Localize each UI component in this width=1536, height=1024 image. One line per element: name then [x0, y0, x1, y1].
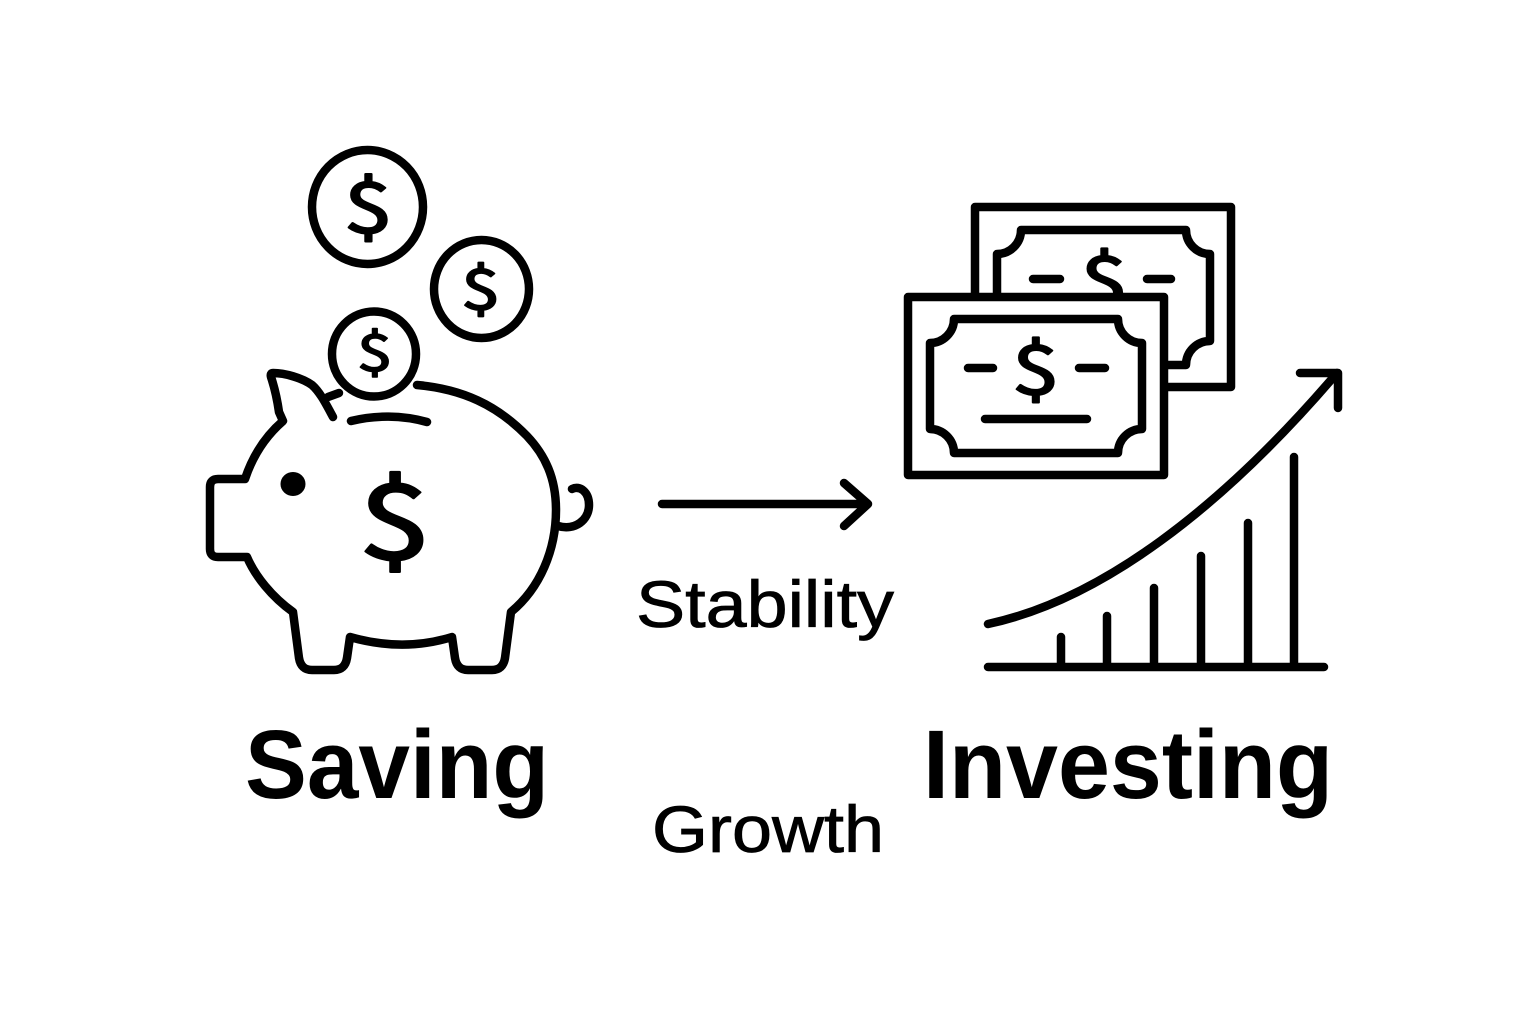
icon: rear banknote [975, 207, 1231, 387]
icon: piggy bank: $ [358, 438, 431, 589]
chart: rising bars with trend arrow [988, 373, 1338, 667]
heading: saving: Saving [245, 710, 549, 819]
icon: right coin [434, 240, 529, 338]
icon: right coin: $ [461, 245, 500, 326]
icon: front banknote: $ [1012, 316, 1059, 414]
icon: piggy bank [210, 373, 589, 670]
icon: large coin [312, 150, 423, 264]
icon: front banknote [908, 297, 1164, 475]
icon: lower coin: $ [357, 312, 392, 386]
heading: investing: Investing [923, 710, 1333, 819]
icon: lower coin [332, 312, 416, 396]
label: stability: Stability [636, 567, 894, 641]
arrow: saving to investing [662, 483, 868, 526]
icon: large coin: $ [344, 151, 392, 253]
label: growth: Growth [652, 792, 884, 866]
icon: rear banknote: $ [1080, 227, 1128, 325]
